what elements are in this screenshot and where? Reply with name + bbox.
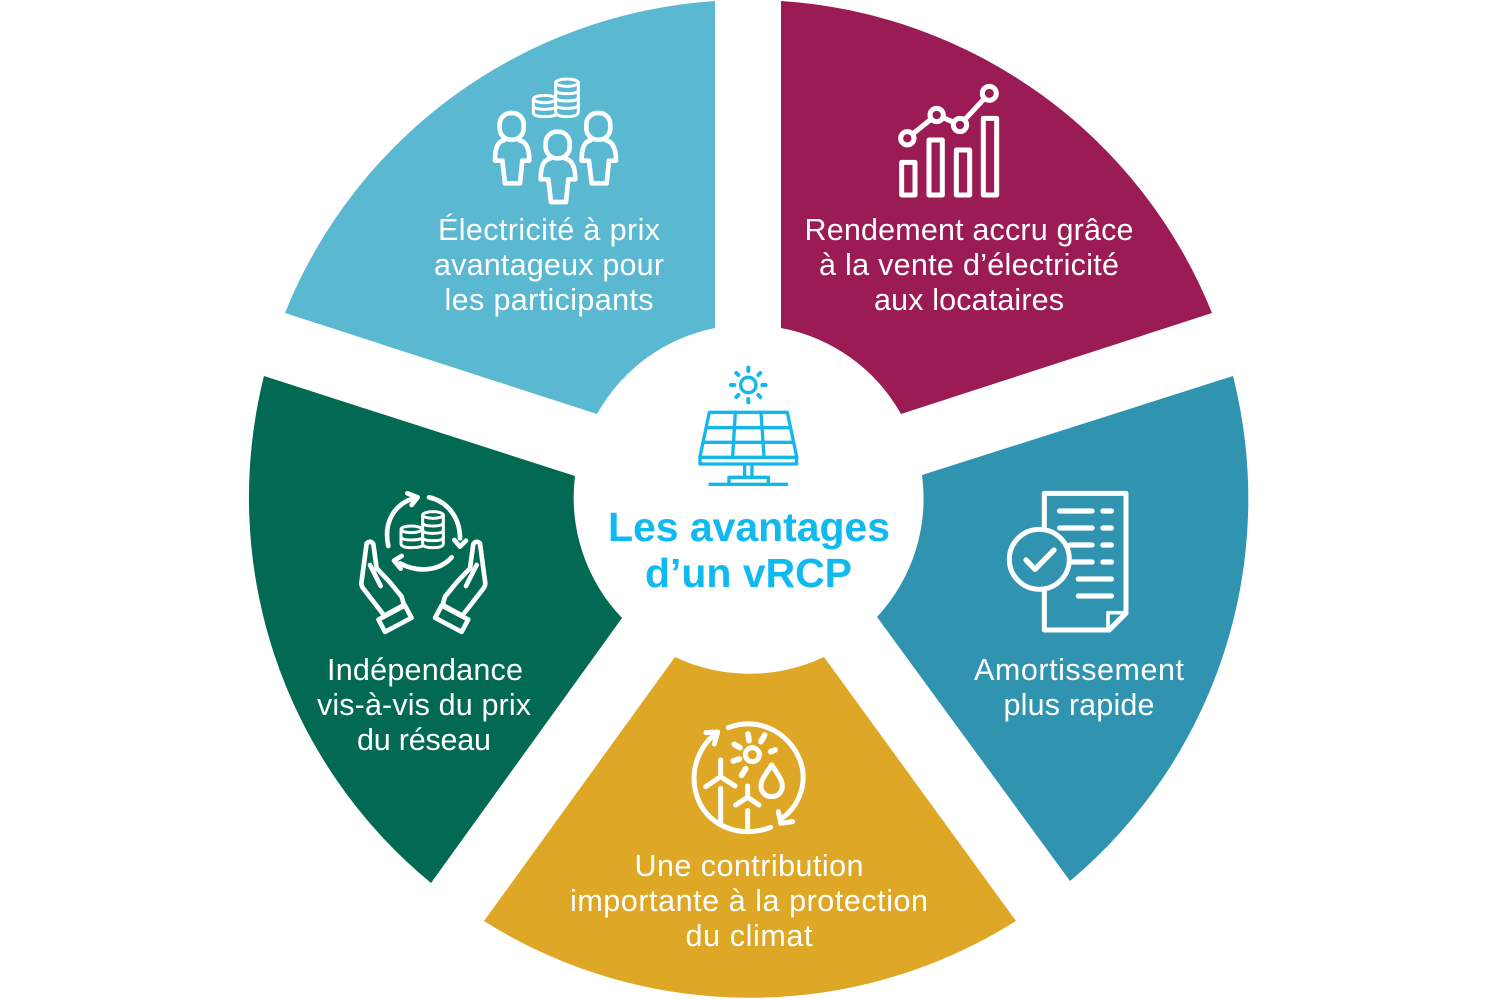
icon: solar panel and sun [700,368,797,484]
panel: amortissement [877,376,1248,881]
panel: climat [484,657,1016,998]
segment: blue [877,376,1248,881]
icon: people and coins [495,79,616,202]
label: les participants [444,283,654,317]
icon: hands with coins [361,493,485,632]
segment: maroon [781,1,1212,414]
icon: renewable energy cycle [694,724,803,832]
label: du réseau [357,723,491,757]
label [570,849,928,953]
label: plus rapide [1004,688,1154,722]
label [434,212,664,317]
heading: Les avantages [608,504,890,550]
label: vis-à-vis du prix [317,688,531,722]
label: Amortissement [974,653,1185,687]
panel: centre [608,368,890,596]
heading [608,504,890,596]
label: à la vente d’électricité [819,248,1119,282]
label [974,653,1185,722]
label [317,653,531,757]
label: du climat [686,919,813,953]
segment: gold [484,657,1016,998]
label: Une contribution [634,849,864,883]
heading: d’un vRCP [645,550,852,596]
icon: document with check [1009,493,1126,630]
label [804,213,1134,317]
label: Indépendance [327,653,523,687]
label: aux locataires [874,283,1064,317]
panel: prix avantageux [285,1,715,414]
label: avantageux pour [434,248,664,282]
label: Électricité à prix [438,212,660,247]
segment: light blue [285,1,715,414]
segment: green [249,376,622,883]
label: importante à la protection [570,884,928,918]
icon: bars and trend line [901,86,997,195]
panel: rendement [781,1,1212,414]
label: Rendement accru grâce [804,213,1134,247]
panel: indépendance [249,376,622,883]
